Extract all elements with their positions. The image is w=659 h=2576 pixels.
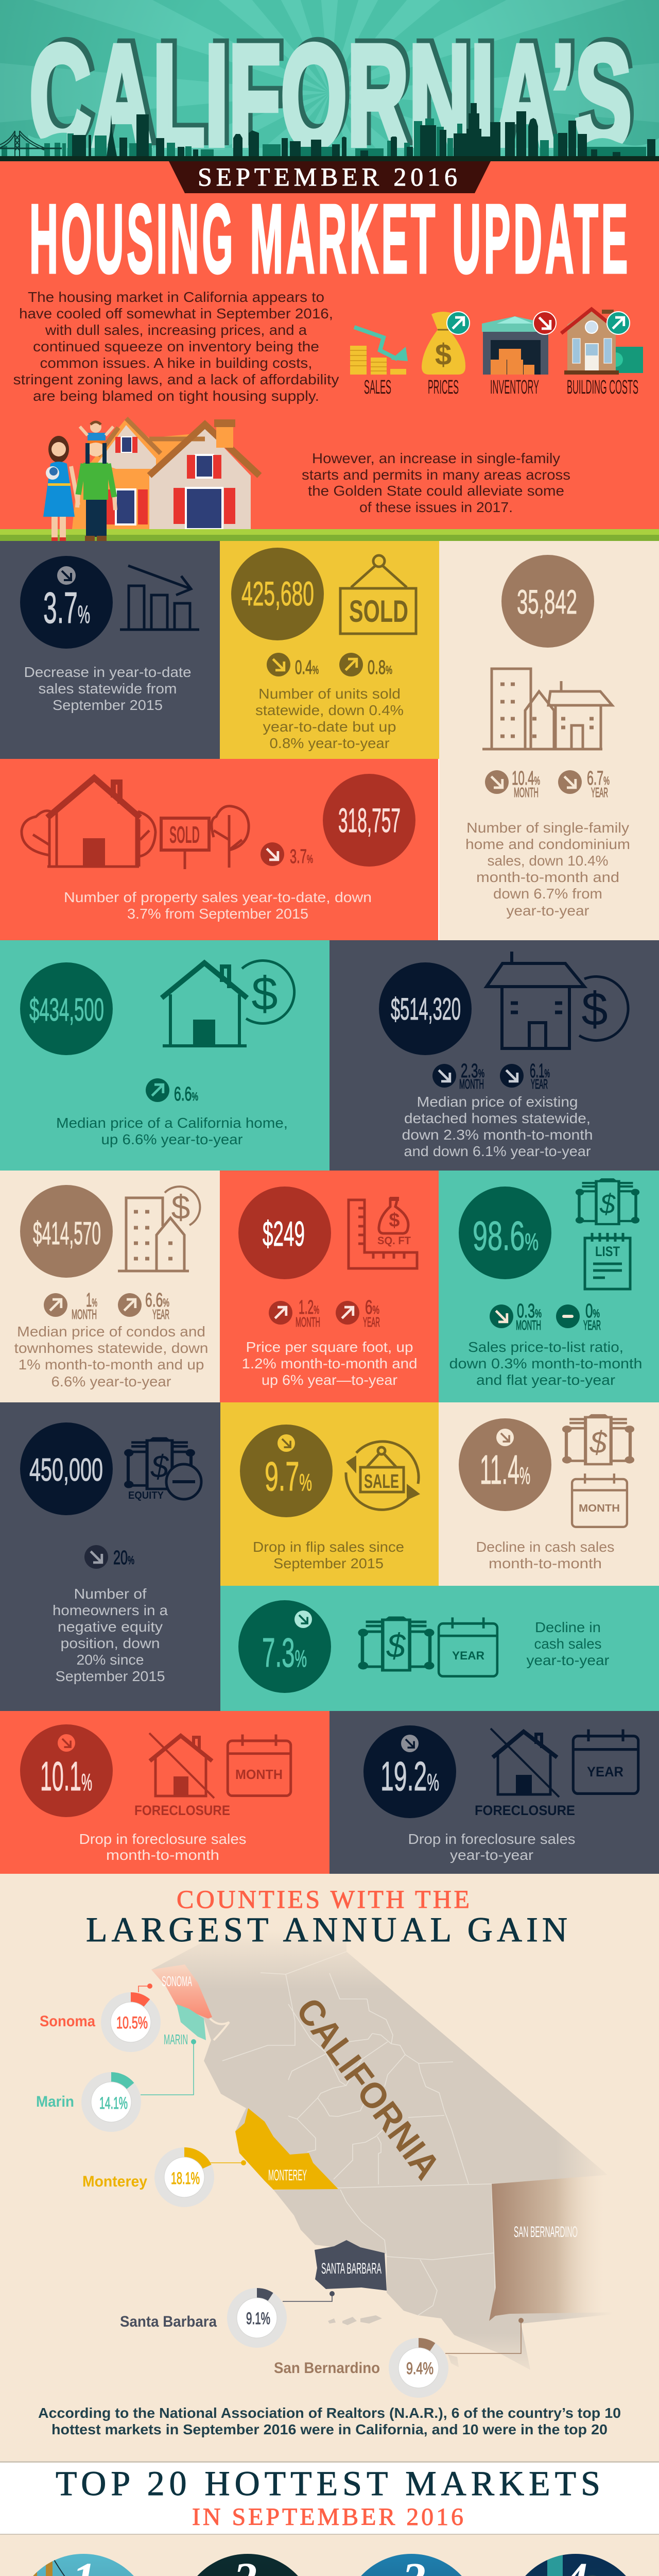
panel: single-family and condo sales: 10.4% [512,768,540,789]
bridge [0,131,62,156]
icon: foreclosed house [475,1728,575,1818]
icon: tower and coin [118,1187,200,1271]
icon: year calendar [573,1730,638,1793]
photo: Vallejo [197,2554,298,2576]
icon: falling bars [120,566,199,630]
panel: units sold: 0.8% [368,657,392,679]
panel: condos and townhomes: townhomes statewide, down [14,1340,208,1356]
icon: prices: $ [435,338,452,371]
panel: single-family and condo sales: down 6.7% from [493,886,602,902]
panel: single-family and condo sales: YEAR [591,785,608,800]
icon: foreclosed house [134,1733,230,1818]
icon: list [585,1233,630,1289]
callout: Monterey: 18.1% [171,2169,200,2188]
panel: foreclosure month: month-to-month [106,1847,219,1863]
icon: year calendar: YEAR [587,1764,623,1780]
icon: prices: PRICES [428,377,459,398]
date ribbon: SEPTEMBER 2016 [198,162,457,191]
icon: house and dollar [162,960,294,1046]
panel: cash sales year: year-to-year [526,1652,610,1668]
panel: existing detached homes: down 2.3% month-to-month [402,1127,593,1143]
icon: sold sign [340,555,416,634]
icon: ruler and money bag: SQ. FT [377,1235,411,1247]
market 2 [197,2554,298,2576]
panel: flip sales [220,1402,439,1586]
closing intro text: of these issues in 2017. [359,499,513,515]
icon: money [564,1415,633,1464]
icon: money and equity minus [126,1438,201,1501]
panel: single-family and condo sales: Number of single-family [466,820,629,836]
panel: cash sales month: month-to-month [489,1555,602,1571]
panel: single-family and condo sales: MONTH [514,785,539,800]
intro text: with dull sales, increasing prices, and a [45,322,307,338]
intro text: continued squeeze on inventory being the [33,338,319,354]
county: Monterey [235,2108,338,2190]
panel: condos and townhomes: 6.6% [145,1290,169,1311]
icon: foreclosed house: FORECLOSURE [475,1803,575,1818]
orange intro panel [0,161,659,541]
panel: units sold: Number of units sold [258,686,401,702]
icon: house and dollar: $ [251,968,278,1020]
map note: According to the National Association of Realtors (N.A.R.), 6 of the country’s top 10 [38,2405,621,2421]
panel: negative equity: September 2015 [56,1668,165,1684]
county: San Bernardino [489,2174,618,2321]
panel: median price: $434,500 [29,992,104,1028]
panel: sales price-to-list ratio: Sales price-to-list ratio, [468,1339,623,1355]
icon: money [360,1618,432,1670]
callout: Sonoma: Sonoma [40,2013,95,2030]
icon: sale sign with cycle arrows: SALE [364,1471,399,1493]
icon: money: $ [589,1425,608,1460]
map section [36,1885,659,2437]
panel: single-family and condo sales: 35,842 [517,583,577,621]
panel: median price: Median price of a California home, [56,1115,288,1131]
panel: condos and townhomes: $414,570 [33,1216,101,1251]
map note: hottest markets in September 2016 were in California, and 10 were in the top 20 [51,2421,608,2437]
panel: flip sales: 9.7% [265,1453,312,1499]
panel: YTD sales decrease [0,541,220,759]
panel: property sales YTD: Number of property sales year-to-date, down [64,889,372,905]
panel: price per square foot: 6% [365,1297,379,1318]
icon: sale sign with cycle arrows [346,1442,420,1510]
panel: existing detached homes: 2.3% [461,1060,484,1082]
icon: ruler and money bag: $ [389,1210,400,1231]
intro text [13,289,339,404]
market 1 [33,2554,134,2576]
panel: price per square foot: MONTH [296,1314,320,1330]
panel: single-family and condo sales: 6.7% [587,768,610,789]
panel: foreclosure month [0,1711,330,1874]
intro text: The housing market in California appears to [28,289,324,305]
panel: sales price-to-list ratio: YEAR [583,1317,601,1333]
panel: foreclosure year: year-to-year [450,1847,533,1863]
top 20 heading band [0,2461,659,2535]
callout: Santa Barbara: Santa Barbara [120,2313,217,2330]
panel: price per square foot: up 6% year—to-year [262,1372,397,1388]
icon: money: $ [599,1189,616,1219]
panel: existing detached homes: 6.1% [530,1060,550,1082]
panel: units sold: 425,680 [241,574,314,613]
closing intro text: starts and permits in many areas across [302,467,570,483]
icon: month calendar [572,1473,627,1527]
intro text: have cooled off somewhat in September 2016, [19,306,333,321]
callout: Sonoma: 10.5% [116,2013,148,2032]
panel: cash sales year: cash sales [534,1636,601,1652]
photo: Dallas [525,2554,626,2576]
panel: condos and townhomes: MONTH [72,1307,97,1322]
panel: negative equity [0,1402,220,1711]
icon: house and coin [487,952,628,1048]
panel: existing detached homes: detached homes statewide, [404,1110,591,1126]
icon: buildings [482,669,612,749]
panel: units sold: 0.4% [295,657,319,679]
callout: Marin: Marin [36,2093,74,2110]
icon: house with sold sign and trees [22,778,249,869]
icon: sales: SALES [364,377,391,398]
map heading: COUNTIES WITH THE [177,1885,470,1913]
panel: median price: up 6.6% year-to-year [101,1131,243,1147]
panel: negative equity: 20% [113,1547,134,1569]
map heading: LARGEST ANNUAL GAIN [86,1910,567,1949]
panel: negative equity: 20% since [76,1652,144,1668]
map heading [86,1885,567,1949]
panel: foreclosure year: 19.2% [380,1753,439,1799]
panel: cash sales month [439,1402,659,1586]
panel: existing detached homes: and down 6.1% year-to-year [404,1143,591,1159]
closing intro text [302,450,570,515]
callout: Sonoma [40,1984,161,2052]
panel: condos and townhomes: YEAR [152,1307,169,1322]
panel: single-family and condo sales: month-to-month and [476,869,619,885]
illustration: family [43,421,115,541]
map of California [129,1906,659,2421]
icon: money and equity minus: EQUITY [128,1490,164,1501]
panel: property sales YTD: 3.7% [290,846,313,868]
closing intro text: the Golden State could alleviate some [308,483,564,499]
family feet over grass [51,529,107,541]
panel: negative equity: Number of [74,1586,147,1602]
panel: property sales YTD: 318,757 [338,801,401,839]
panel: existing detached homes: MONTH [459,1076,484,1092]
panel: sales price-to-list ratio: 0% [585,1300,600,1322]
panel: units sold [220,541,439,759]
panel: price per square foot: 1.2% month-to-month and [242,1355,417,1371]
county: Sonoma [151,1964,212,2019]
icon: year calendar: YEAR [452,1649,484,1662]
panel: YTD sales decrease: sales statewide from [38,681,177,697]
panel: condos and townhomes: 1% month-to-month and up [19,1357,204,1372]
panel: cash sales year: Decline in [535,1619,601,1635]
panel: YTD sales decrease: 3.7% [43,584,90,633]
panel: flip sales: Drop in flip sales since [253,1539,404,1555]
icon: foreclosed house: FORECLOSURE [134,1803,230,1818]
panel: condos and townhomes: Median price of condos and [17,1324,205,1340]
callout: Marin [36,2039,196,2132]
map note [38,2405,621,2437]
panel: cash sales month: Decline in cash sales [476,1539,615,1555]
intro text: stringent zoning laws, and a lack of affordability [13,371,339,387]
panel: sales price-to-list ratio: down 0.3% month-to-month [449,1355,643,1371]
panel: YTD sales decrease: September 2015 [53,697,163,713]
panel: single-family and condo sales: year-to-year [507,903,589,919]
icon: inventory [482,312,556,398]
icon: sold sign: SOLD [349,594,408,629]
icon: tower and coin: $ [171,1188,190,1226]
panel: negative equity: position, down [61,1635,160,1651]
callout: Monterey [82,2147,246,2207]
intro text: are being blamed on tight housing supply. [33,388,319,404]
icon: ruler and money bag [349,1199,417,1268]
panel: sales price-to-list ratio: MONTH [516,1317,541,1333]
icon: money: $ [386,1626,406,1665]
callout: San Bernardino: 9.4% [406,2359,433,2378]
icon: building costs [561,308,643,398]
panel: sales price-to-list ratio: 0.3% [517,1300,542,1322]
county: Marin: MARIN [164,2031,188,2047]
header panel [0,0,659,161]
panel: price per square foot: 1.2% [299,1297,319,1318]
county: San Bernardino: SAN BERNARDINO [514,2224,578,2241]
panel: median price [0,940,330,1171]
panel: sales price-to-list ratio: 98.6% [473,1213,539,1259]
photo: Denver [361,2554,462,2576]
county: Santa Barbara: SANTA BARBARA [321,2260,381,2277]
panel: foreclosure year [330,1711,659,1874]
panel: cash sales year: 7.3% [262,1630,307,1675]
callout: Santa Barbara [120,2288,335,2348]
panel: property sales YTD [0,759,439,940]
illustration: house [72,418,259,529]
skyline: front layer [72,103,655,156]
panel: single-family and condo sales: home and condominium [465,836,630,852]
panel: price per square foot: YEAR [363,1314,380,1330]
grass [0,529,659,541]
panel: foreclosure month: 10.1% [40,1753,92,1799]
panel: cash sales year [220,1586,659,1711]
top 20 heading band: IN SEPTEMBER 2016 [192,2503,463,2531]
panel: price per square foot: $249 [263,1214,305,1253]
panel: negative equity: 450,000 [29,1452,103,1488]
panel: property sales YTD: 3.7% from September 2015 [127,906,308,922]
county: Marin [164,2004,206,2047]
panel: price per square foot [220,1171,439,1402]
icon: list: LIST [595,1244,620,1259]
county: Sonoma: SONOMA [162,1973,192,1989]
panel: existing detached homes: Median price of existing [417,1094,578,1110]
photo: San Francisco [33,2554,134,2576]
callout: Santa Barbara: 9.1% [246,2309,270,2328]
county: Monterey: MONTEREY [268,2167,307,2184]
panel: flip sales: September 2015 [273,1555,384,1571]
panel: median price: 6.6% [174,1083,198,1105]
icon: year calendar [439,1617,497,1676]
county: Santa Barbara [315,2240,387,2291]
panel: sales price-to-list ratio: and flat year-to-year [476,1372,615,1388]
intro text: common issues. A hike in building costs, [40,355,312,371]
market 4 [525,2554,626,2576]
callout: Monterey: Monterey [82,2173,147,2190]
panel: condos and townhomes: 1% [86,1290,97,1311]
panel: units sold: statewide, down 0.4% [255,702,404,718]
callout: San Bernardino [274,2318,524,2398]
panel: cash sales month: 11.4% [480,1447,530,1493]
icon: house and coin: $ [581,983,608,1036]
panel: YTD sales decrease: Decrease in year-to-date [24,664,192,680]
icon: month calendar: MONTH [235,1767,283,1782]
panel: condos and townhomes: 6.6% year-to-year [51,1374,171,1389]
panel: units sold: 0.8% year-to-year [270,735,389,751]
panel: sales price-to-list ratio [439,1171,659,1402]
panel: negative equity: negative equity [58,1619,163,1635]
panel: existing detached homes: $514,320 [391,992,461,1026]
map label: CALIFORNIA [288,1991,448,2187]
icon: sales [350,327,408,398]
panel: existing detached homes [330,940,659,1171]
panel: units sold: year-to-date but up [263,719,396,735]
top 20 heading band: TOP 20 HOTTEST MARKETS [56,2464,600,2503]
icon: inventory: INVENTORY [490,377,539,398]
closing intro text: However, an increase in single-family [312,450,560,466]
panel: condos and townhomes [0,1171,220,1402]
callout: Marin: 14.1% [99,2094,128,2112]
panel: foreclosure month: Drop in foreclosure sales [79,1831,246,1847]
icon: money and equity minus: $ [150,1449,169,1485]
panel: price per square foot: Price per square foot, up [246,1339,413,1355]
icon: month calendar: MONTH [579,1503,620,1514]
panel: single-family and condo sales [439,541,659,940]
icon: month calendar [228,1734,291,1796]
callout: San Bernardino: San Bernardino [274,2360,380,2377]
icon: house with sold sign and trees: SOLD [169,821,200,848]
panel: foreclosure year: Drop in foreclosure sales [408,1831,576,1847]
panel: existing detached homes: YEAR [531,1076,548,1092]
panel: single-family and condo sales: sales, down 10.4% [487,853,609,869]
skyline: mid layer [2,118,646,156]
market 3 [361,2554,462,2576]
pale hills [28,133,659,151]
panel: negative equity: homeowners in a [53,1602,168,1618]
icon: prices [422,312,470,398]
icon: money [577,1179,638,1224]
